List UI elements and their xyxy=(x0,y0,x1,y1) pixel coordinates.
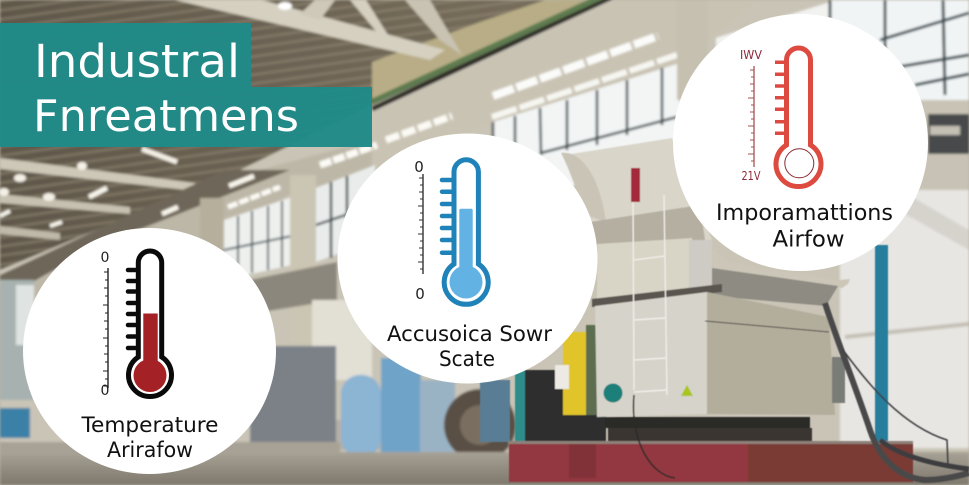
blue post xyxy=(875,245,888,441)
red base xyxy=(508,441,913,445)
label xyxy=(716,201,893,252)
black scale: 0 xyxy=(101,250,109,266)
rounded hump xyxy=(561,153,606,222)
panel: temperature airflow circle xyxy=(23,228,276,474)
panel: acoustic scale circle xyxy=(338,134,598,384)
label: Temperature xyxy=(80,413,218,437)
label xyxy=(387,322,552,371)
gauge xyxy=(555,365,569,389)
label: Imporamattions xyxy=(716,201,893,226)
shaded underside xyxy=(712,268,838,306)
dark scale: 0 xyxy=(415,285,425,303)
title banner xyxy=(0,23,372,147)
icon: red thermometer xyxy=(775,48,821,187)
icon: black thermometer xyxy=(128,251,172,397)
title text: Industral xyxy=(34,35,240,88)
upper housing xyxy=(565,138,712,250)
label: Scate xyxy=(439,347,495,371)
hose xyxy=(825,303,969,480)
panel: information airflow circle xyxy=(673,14,928,271)
red scale: 21V xyxy=(742,169,761,183)
label xyxy=(80,413,218,462)
side bracket xyxy=(832,357,845,403)
label: Arirafow xyxy=(107,438,193,462)
red scale: IWV xyxy=(740,48,763,62)
ladder xyxy=(633,195,667,395)
title text xyxy=(33,35,299,142)
lower front face xyxy=(595,292,707,417)
black scale xyxy=(101,250,109,399)
top lip xyxy=(700,240,850,288)
teal support column xyxy=(515,370,525,442)
red label xyxy=(631,168,640,202)
yellow panel xyxy=(563,332,595,415)
red scale xyxy=(740,48,763,183)
upper block xyxy=(597,238,700,302)
middle ledge xyxy=(590,205,705,252)
dark scale: 0 xyxy=(414,158,424,176)
title text: Fnreatmens xyxy=(33,91,299,142)
dark area behind machine xyxy=(516,370,606,442)
lower side face xyxy=(707,292,835,415)
warning triangle xyxy=(681,385,693,396)
icon: blue thermometer xyxy=(442,160,488,304)
fan wheel edge xyxy=(480,380,510,442)
dark patterned strip xyxy=(592,284,722,307)
dark turntable xyxy=(608,428,812,441)
label: Airfow xyxy=(772,228,845,252)
label: Accusoica Sowr xyxy=(387,322,552,346)
dark scale xyxy=(414,158,425,303)
machine on red base xyxy=(480,138,969,482)
black scale: 0 xyxy=(101,383,109,399)
circular badge xyxy=(604,384,622,402)
